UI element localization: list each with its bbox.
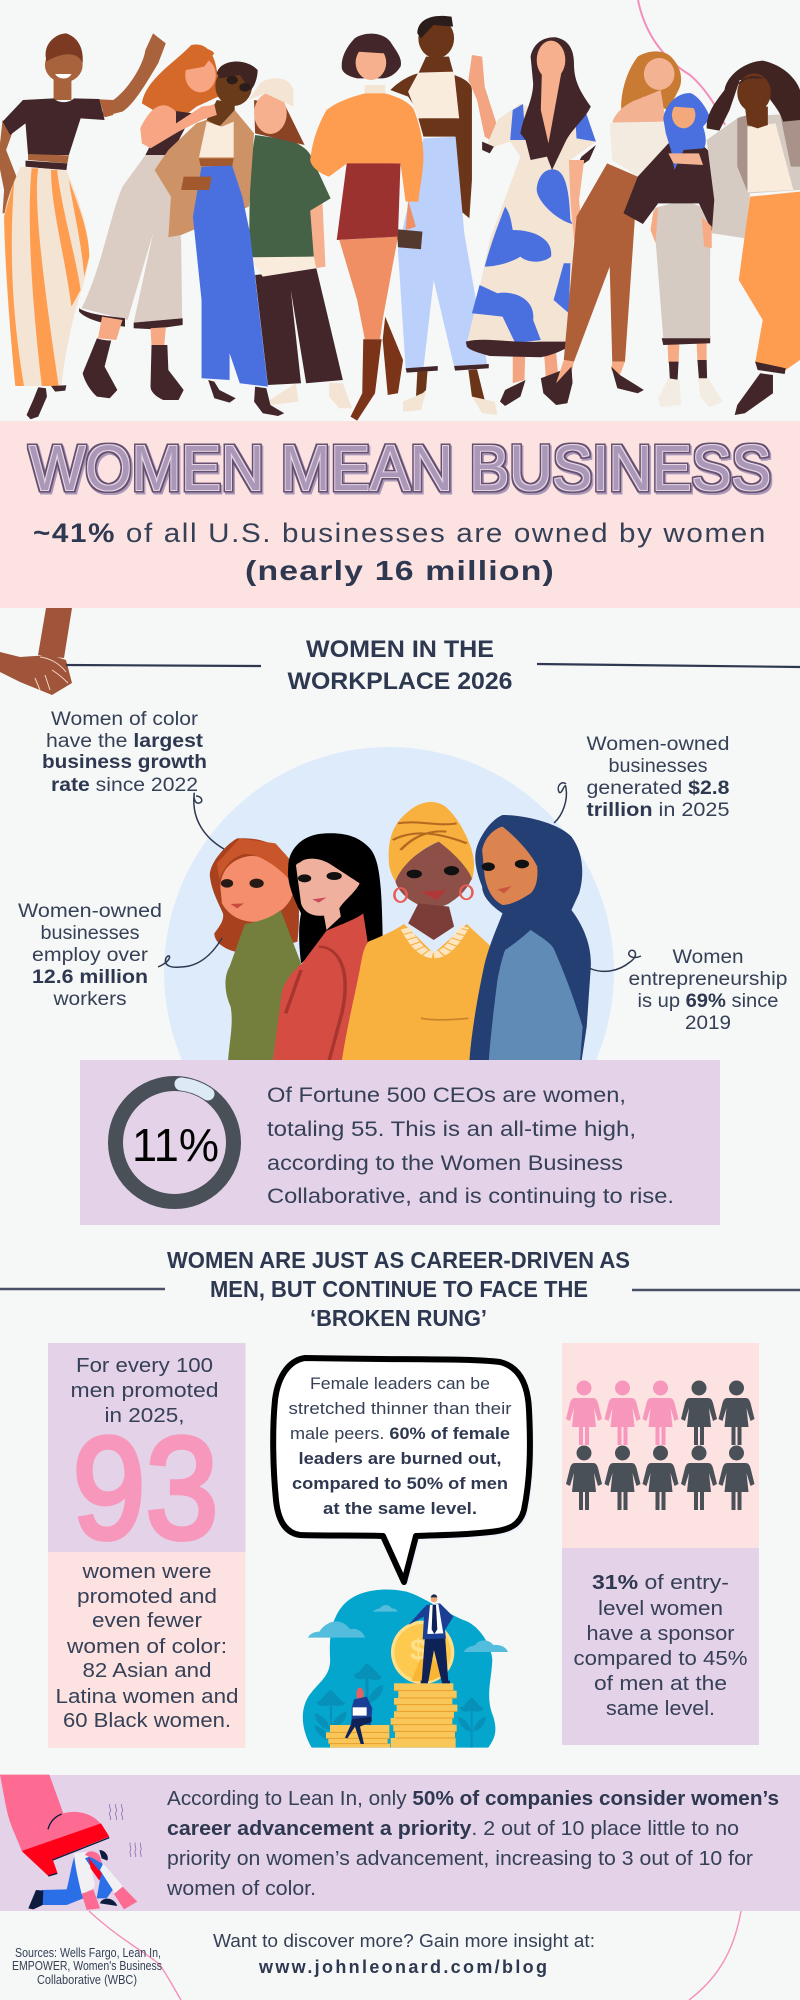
illustration: boot on man	[0, 1775, 141, 1910]
woman 9: blue hair, dark puffy jacket	[623, 93, 742, 407]
sources: Collaborative (WBC)	[37, 1973, 137, 1987]
callout: business growth: Women of color	[51, 709, 199, 730]
woman 7: patterned dress	[466, 37, 596, 406]
callout: employment: businesses	[40, 923, 140, 944]
text block: same level.	[606, 1698, 715, 1720]
panel: sponsor statistic	[562, 1343, 759, 1745]
donut chart: 11%: 11%	[132, 1119, 219, 1171]
man kneeling	[28, 1850, 137, 1910]
subtitle line 2: (nearly 16 million)	[245, 555, 555, 586]
speech bubble: compared to 50% of men	[292, 1474, 508, 1493]
boot	[0, 1775, 109, 1876]
text: for every 100 men	[70, 1355, 218, 1427]
text: women were promoted: even fewer	[92, 1610, 202, 1632]
woman B: black hair, red jacket	[273, 833, 383, 1061]
text block: career advancement a priority . 2 out of 10 place little to no	[167, 1817, 739, 1840]
callout: employment: 12.6 million	[32, 967, 148, 988]
speech bubble: male peers. 60% of female	[290, 1424, 510, 1443]
heading: women in the workplace: WORKPLACE 2026	[288, 668, 512, 695]
divider lines	[0, 1289, 800, 1290]
woman 1: striped trousers	[0, 33, 166, 419]
big number 93: 93	[72, 1407, 218, 1569]
text block: 31% of entry-	[592, 1572, 729, 1594]
decorative pink curves bottom	[89, 1911, 741, 2000]
callout: revenue: generated $2.8	[586, 778, 730, 799]
callout: business growth: have the largest	[46, 731, 204, 752]
heading: broken rung: ‘BROKEN RUNG’	[310, 1305, 487, 1331]
text: women were promoted: Latina women and	[56, 1686, 238, 1708]
heading: broken rung: MEN, BUT CONTINUE TO FACE THE	[210, 1276, 588, 1302]
text block: according to the Women Business	[267, 1151, 623, 1175]
call to action: Want to discover more? Gain more insight at:	[213, 1931, 595, 1951]
coin stacks	[326, 1683, 457, 1748]
text: women were promoted: 82 Asian and	[82, 1660, 212, 1682]
panel: Fortune 500 CEOs	[80, 1060, 720, 1225]
woman A: red hair, green sweater	[210, 838, 301, 1061]
text block	[166, 1787, 779, 1900]
callout: entrepreneurship: is up 69% since	[638, 991, 778, 1012]
call to action	[213, 1931, 595, 1977]
text block: have a sponsor	[586, 1623, 735, 1645]
heading: women in the workplace: WOMEN IN THE	[306, 636, 494, 663]
big coin: $	[410, 1634, 427, 1667]
sources: Sources: Wells Fargo, Lean In,	[15, 1946, 161, 1960]
text: women were promoted: promoted and	[77, 1586, 217, 1608]
callout: employment: employ over	[32, 945, 149, 966]
text block: Collaborative, and is continuing to rise.	[267, 1184, 674, 1208]
pictogram: ten women	[566, 1380, 754, 1510]
businessman	[408, 1594, 453, 1683]
text: for every 100 men: in 2025,	[104, 1405, 184, 1427]
callout: employment: Women-owned	[18, 901, 162, 922]
heading: women in the workplace	[288, 636, 512, 695]
woman 10: big dark hair, orange trousers, grey coat	[707, 61, 800, 415]
call to action: www.johnleonard.com/blog	[258, 1957, 547, 1977]
callout: entrepreneurship: entrepreneurship	[628, 969, 788, 990]
callout: business growth: business growth	[42, 752, 207, 773]
callout: employment: workers	[52, 989, 126, 1010]
speech bubble: leaders are burned out,	[298, 1449, 502, 1468]
big coin	[391, 1621, 454, 1684]
businesswoman	[345, 1688, 372, 1744]
text block: women of color.	[166, 1877, 316, 1900]
illustration: coins and business people	[303, 1589, 508, 1748]
callout: revenue: trillion in 2025	[586, 800, 730, 821]
donut chart: 11%	[116, 1084, 234, 1202]
stress marks	[110, 1804, 141, 1857]
sources	[12, 1946, 162, 1987]
callout: entrepreneurship: Women	[672, 947, 744, 968]
callout: business growth	[42, 709, 224, 849]
woman 6: crop top, light blue trousers	[390, 16, 497, 415]
text: women were promoted: women of color:	[66, 1636, 227, 1658]
sources: EMPOWER, Women's Business	[12, 1959, 162, 1973]
text block: According to Lean In, only 50% of companies consider women’s	[167, 1787, 779, 1810]
text block: compared to 45%	[574, 1648, 748, 1670]
speech bubble: Female leaders can be	[310, 1374, 490, 1393]
callout: entrepreneurship	[589, 947, 788, 1034]
subtitle line 1: ~41% of all U.S. businesses are owned by women	[33, 518, 767, 548]
text block: level women	[598, 1598, 723, 1620]
callout: employment	[18, 901, 222, 1010]
callout: revenue: businesses	[608, 756, 708, 777]
woman 8: off-shoulder top, brown trousers	[556, 51, 681, 393]
text block	[267, 1083, 674, 1208]
text block: priority on women’s advancement, increasing to 3 out of 10 for	[167, 1847, 753, 1870]
decorative pink curve top	[638, 0, 725, 125]
text: for every 100 men: men promoted	[70, 1380, 218, 1402]
panel: Lean In statistic	[0, 1775, 800, 1911]
text block	[574, 1572, 748, 1720]
illustration: holding hands	[0, 608, 72, 695]
speech bubble: stretched thinner than their	[288, 1399, 512, 1418]
woman 4: green shirt, bucket hat	[248, 78, 352, 408]
heading: broken rung	[167, 1247, 630, 1331]
callout: revenue: Women-owned	[586, 734, 730, 755]
clouds	[308, 1605, 508, 1652]
speech bubble: at the same level.	[323, 1499, 477, 1518]
text: for every 100 men: For every 100	[76, 1355, 213, 1377]
callout: business growth: rate since 2022	[51, 775, 198, 796]
callout: revenue	[554, 734, 730, 823]
woman D: blue hijab	[469, 815, 591, 1061]
text block: Of Fortune 500 CEOs are women,	[267, 1083, 626, 1107]
text block: of men at the	[594, 1673, 727, 1695]
woman 3: sunglasses, blue trousers, tan coat	[155, 62, 284, 416]
heading: broken rung: WOMEN ARE JUST AS CAREER-DRIVEN AS	[167, 1247, 630, 1273]
title band	[0, 421, 800, 608]
illustration: four women	[210, 802, 591, 1061]
text: women were promoted: 60 Black women.	[63, 1710, 231, 1732]
plants	[314, 1663, 486, 1748]
illustration: group of women	[0, 16, 800, 421]
panel: 93 promoted	[48, 1343, 246, 1748]
woman C: turban, yellow dress, pearl necklace	[342, 802, 491, 1061]
woman 2: red hair, beige culottes	[79, 45, 218, 400]
woman 5: orange sweater, red skirt, tattoos	[310, 34, 423, 421]
divider lines	[66, 664, 800, 667]
speech bubble	[273, 1358, 534, 1586]
text block: totaling 55. This is an all-time high,	[267, 1117, 636, 1141]
callout: entrepreneurship: 2019	[685, 1013, 731, 1034]
text: women were promoted	[56, 1561, 238, 1732]
text: women were promoted: women were	[81, 1561, 212, 1583]
